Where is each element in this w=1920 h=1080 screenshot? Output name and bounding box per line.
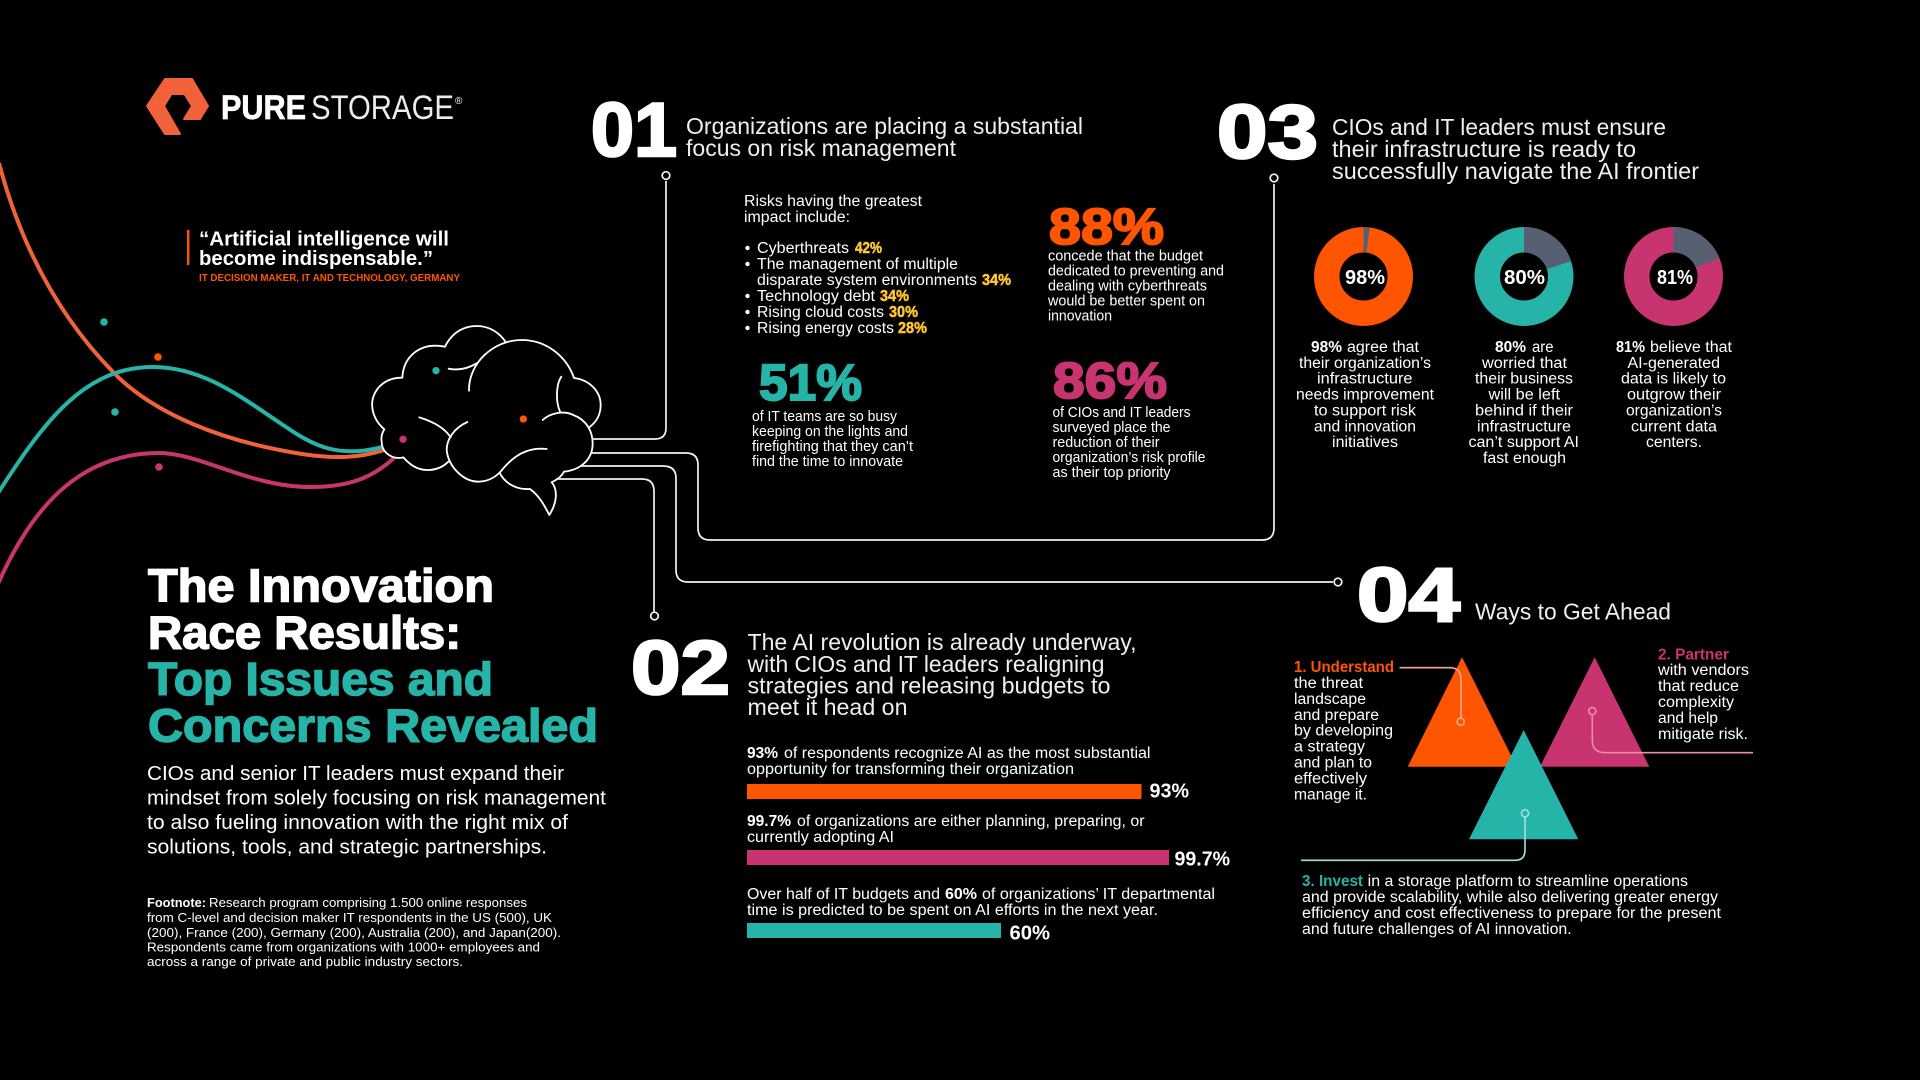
text: 2. Partner: complexity [1658, 694, 1734, 711]
stat: 88%: would be better spent on [1047, 294, 1205, 310]
leader line: invest [1301, 810, 1529, 860]
bar chart item: 99.7%: of organizations are either planning, preparing, or [797, 813, 1144, 830]
text: 1. Understand: landscape [1294, 691, 1366, 708]
bar chart item: 99.7%: 99.7% [1174, 848, 1230, 870]
stat: 51%: firefighting that they can’t [752, 439, 913, 455]
triangle: invest [1469, 730, 1578, 839]
triangle: partner [1540, 657, 1649, 767]
donut caption: 80%: infrastructure [1477, 418, 1571, 435]
donut caption: 80%: worried that [1481, 355, 1568, 372]
donut chart: 80% [1487, 227, 1571, 313]
text: 1. Understand: the threat [1294, 675, 1364, 692]
donut chart: 98%: 98% [1345, 267, 1385, 289]
section 03 heading: 03 [1217, 90, 1318, 175]
bar chart item: 60%: time is predicted to be spent on AI efforts in the next year. [747, 902, 1158, 919]
donut caption: 80% [1468, 339, 1579, 467]
quote [187, 228, 460, 284]
section 02 heading: The AI revolution is already underway, [748, 629, 1136, 655]
footnote: Footnote: [147, 896, 206, 910]
stat: 51%: 51% [759, 354, 862, 411]
title: Race Results: [148, 606, 461, 658]
stat: 88%: 88% [1049, 198, 1164, 255]
section 01: risk list: Rising cloud costs [757, 304, 884, 321]
bar chart item: 99.7%: 99.7% [747, 813, 791, 830]
section 01: risk list: 42% [855, 240, 882, 257]
text: 2. Partner: that reduce [1658, 678, 1739, 695]
leader line: partner [1589, 707, 1753, 753]
donut caption: 98%: initiatives [1332, 434, 1398, 451]
donut caption: 81%: believe that [1650, 339, 1733, 356]
section 01: risk list: impact include: [744, 209, 850, 226]
bar chart item: 99.7% [747, 813, 1230, 870]
bar chart item: 60%: of organizations’ IT departmental [982, 886, 1215, 903]
logo: Pure Storage: STORAGE [311, 89, 454, 127]
text: 3. Invest: and provide scalability, while also delivering greater energy [1302, 889, 1718, 906]
section 01: risk list [744, 193, 1011, 337]
triangle: understand [1408, 657, 1517, 767]
donut caption: 81%: 81% [1616, 339, 1645, 356]
bar chart item: 60%: 60% [945, 886, 977, 903]
leader line: understand [1400, 668, 1464, 725]
section 01: risk list: Cyberthreats [757, 240, 849, 257]
text: 1. Understand: and plan to [1294, 755, 1372, 772]
quote: become indispensable.” [199, 248, 433, 270]
donut chart: 81% [1637, 227, 1719, 313]
text: 1. Understand [1294, 659, 1394, 804]
donut caption: 81%: AI-generated [1628, 355, 1720, 372]
stat: 51%: of IT teams are so busy [752, 409, 898, 425]
title: The Innovation [148, 560, 494, 612]
donut caption: 80%: fast enough [1483, 450, 1566, 467]
stat: 86%: reduction of their [1052, 435, 1160, 451]
section 01 heading: 01 [591, 88, 677, 173]
donut caption: 81%: centers. [1646, 434, 1702, 451]
text: 1. Understand: 1. Understand [1294, 659, 1394, 676]
stat: 51% [752, 354, 913, 470]
donut caption: 81%: organization’s [1626, 402, 1722, 419]
section 01: risk list: 34% [880, 288, 909, 305]
section 01: risk list: disparate system environments [757, 272, 977, 289]
footnote: Research program comprising 1.500 online responses [209, 896, 527, 910]
donut caption: 81%: current data [1631, 418, 1717, 435]
intro paragraph: mindset from solely focusing on risk management [147, 788, 606, 810]
connector: brain to 04 [580, 466, 1342, 586]
section 03 heading: their infrastructure is ready to [1332, 136, 1636, 162]
stat: 88%: dedicated to preventing and [1048, 264, 1224, 280]
text: 2. Partner: with vendors [1657, 662, 1749, 679]
text: 1. Understand: and prepare [1294, 707, 1379, 724]
section 02 heading: meet it head on [748, 694, 908, 720]
stat: 86%: as their top priority [1052, 465, 1171, 481]
stat: 86%: of CIOs and IT leaders [1052, 405, 1190, 421]
intro paragraph: CIOs and senior IT leaders must expand their [147, 763, 564, 785]
bar chart item: 60%: 60% [1010, 922, 1050, 944]
bar chart item: 60%: Over half of IT budgets and [747, 886, 940, 903]
donut caption: 98%: their organization’s [1299, 355, 1431, 372]
section 04 heading: Ways to Get Ahead [1475, 598, 1671, 624]
stat: 51%: keeping on the lights and [752, 424, 908, 440]
donut caption: 98% [1296, 339, 1435, 451]
section 01 heading: Organizations are placing a substantial [686, 113, 1083, 139]
footnote: from C-level and decision maker IT respondents in the US (500), UK [147, 911, 553, 925]
text: 3. Invest: and future challenges of AI innovation. [1302, 921, 1572, 938]
section 02 heading: 02 [631, 626, 730, 711]
text: 1. Understand: manage it. [1294, 787, 1367, 804]
section 01: risk list: Rising energy costs [757, 320, 894, 337]
section 01: risk list: Technology debt [757, 288, 876, 305]
section 04 heading: 04 [1357, 553, 1460, 638]
footnote: Respondents came from organizations with 1000+ employees and [147, 940, 540, 954]
donut caption: 81%: outgrow their [1627, 387, 1721, 404]
stat: 86%: 86% [1053, 352, 1167, 409]
donut caption: 80%: their business [1475, 371, 1573, 388]
quote: IT DECISION MAKER, IT AND TECHNOLOGY, GERMANY [199, 272, 460, 284]
donut caption: 98%: 98% [1311, 339, 1342, 356]
donut caption: 80%: can’t support AI [1468, 434, 1579, 451]
footnote [147, 896, 561, 969]
title: Top Issues and [148, 653, 493, 705]
footnote: (200), France (200), Germany (200), Australia (200), and Japan(200). [147, 926, 561, 940]
connector: brain to 02 [556, 479, 658, 620]
donut chart: 98% [1327, 227, 1400, 313]
section 03 heading: successfully navigate the AI frontier [1332, 158, 1699, 184]
stat: 88%: concede that the budget [1048, 248, 1203, 264]
donut caption: 98%: to support risk [1314, 402, 1416, 419]
text: 3. Invest: 3. Invest [1302, 873, 1363, 890]
logo: Pure Storage: PURE [221, 89, 306, 127]
text: 2. Partner [1657, 646, 1749, 743]
donut caption: 81% [1616, 339, 1733, 451]
section 01: risk list: 34% [982, 272, 1011, 289]
text: 3. Invest [1302, 873, 1722, 938]
section 01: risk list: 30% [889, 304, 918, 321]
text: 2. Partner: 2. Partner [1658, 646, 1729, 664]
logo: Pure Storage [147, 79, 463, 134]
section 03 heading [1217, 90, 1699, 184]
donut caption: 80%: behind if their [1475, 402, 1573, 419]
section 01: risk list: The management of multiple [757, 256, 958, 273]
donut caption: 98%: needs improvement [1296, 387, 1435, 404]
section 02 heading: strategies and releasing budgets to [748, 672, 1110, 698]
text: 3. Invest: efficiency and cost effectiveness to prepare for the present [1302, 905, 1722, 922]
section 04 heading [1357, 553, 1671, 638]
donut caption: 98%: infrastructure [1317, 371, 1412, 388]
donut chart: 80%: 80% [1504, 267, 1545, 289]
text: 1. Understand: effectively [1294, 771, 1367, 788]
section 01 heading [591, 88, 1083, 173]
text: 1. Understand: a strategy [1294, 739, 1365, 756]
title [148, 560, 598, 752]
donut caption: 80%: 80% [1495, 339, 1526, 356]
footnote: across a range of private and public industry sectors. [147, 955, 463, 969]
section 01: risk list: 28% [898, 320, 927, 337]
text: 1. Understand: by developing [1294, 723, 1393, 740]
stat: 51%: find the time to innovate [752, 454, 903, 470]
icon: brain outline [372, 326, 601, 515]
section 02 heading [631, 626, 1136, 720]
donut chart: 81%: 81% [1657, 267, 1693, 289]
section 03 heading: CIOs and IT leaders must ensure [1332, 114, 1666, 140]
bar chart item: 93%: of respondents recognize AI as the most substantial [784, 745, 1150, 762]
stat: 88%: dealing with cyberthreats [1048, 278, 1207, 294]
donut caption: 80%: are [1532, 339, 1554, 356]
floating dots [100, 318, 163, 471]
bar chart item: 99.7%: currently adopting AI [747, 829, 894, 846]
bar chart item: 93% [747, 745, 1189, 802]
stat: 88% [1047, 198, 1224, 324]
intro paragraph: to also fueling innovation with the right mix of [147, 812, 568, 834]
intro paragraph [147, 763, 606, 858]
connector: brain to 03 [592, 174, 1278, 540]
donut caption: 98%: agree that [1347, 339, 1420, 356]
donut caption: 98%: and innovation [1314, 418, 1416, 435]
section 01: risk list: Risks having the greatest [744, 193, 923, 210]
stat: 88%: innovation [1048, 308, 1112, 324]
donut caption: 80%: will be left [1487, 387, 1561, 404]
stat: 86%: surveyed place the [1052, 420, 1170, 436]
intro paragraph: solutions, tools, and strategic partnerships. [147, 836, 547, 858]
flowing coloured curves [0, 163, 394, 584]
text: 3. Invest: in a storage platform to streamline operations [1368, 873, 1688, 890]
quote: “Artificial intelligence will [199, 228, 449, 250]
bar chart item: 60% [747, 886, 1215, 944]
logo: Pure Storage: ® [455, 96, 463, 107]
donut caption: 81%: data is likely to [1621, 371, 1726, 388]
stat: 86% [1052, 352, 1206, 481]
text: 2. Partner: and help [1658, 710, 1718, 727]
section 01 heading: focus on risk management [686, 135, 957, 161]
section 02 heading: with CIOs and IT leaders realigning [747, 651, 1104, 677]
bar chart item: 93%: 93% [1150, 780, 1189, 802]
connector: brain to 01 [592, 172, 670, 439]
bar chart item: 93%: 93% [747, 745, 778, 762]
text: 2. Partner: mitigate risk. [1658, 726, 1748, 743]
title: Concerns Revealed [148, 700, 598, 752]
stat: 86%: organization’s risk profile [1052, 450, 1206, 466]
bar chart item: 93%: opportunity for transforming their organization [747, 761, 1074, 778]
